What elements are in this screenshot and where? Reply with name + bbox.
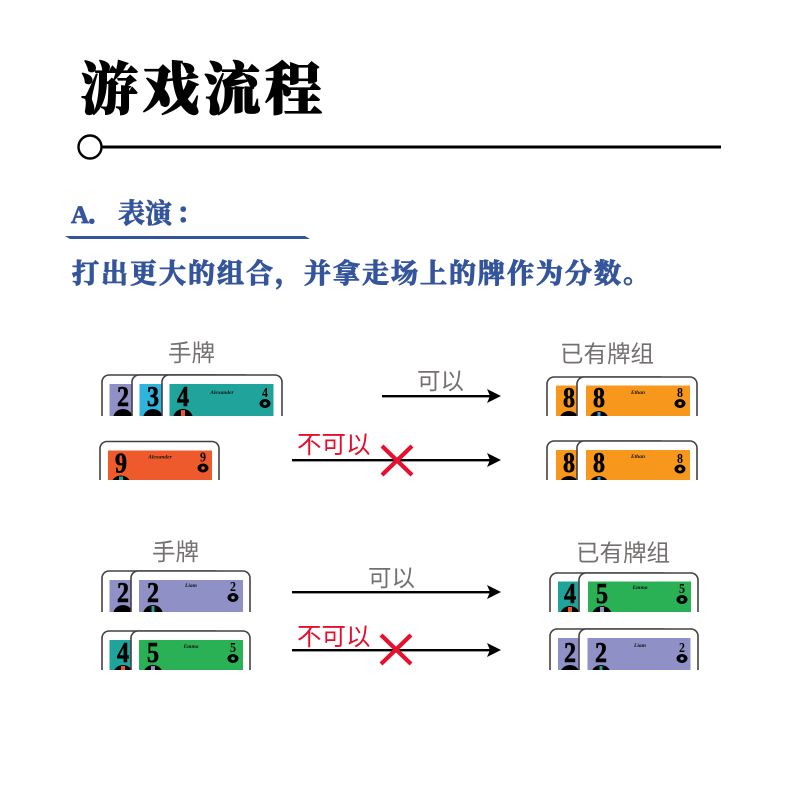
- card: teal 4: 4: [262, 386, 268, 401]
- card: teal 4: Alexander: [209, 390, 235, 396]
- existing set row 1: [546, 376, 698, 416]
- title: 游戏流程: [81, 59, 322, 122]
- label: existing set 1: 已有牌组: [560, 341, 654, 367]
- card: teal 4 back: 4: [117, 638, 129, 669]
- existing set row 4: [549, 628, 699, 670]
- card: purple 2 front: 2: [679, 641, 685, 656]
- label: not allowed 1: 不可以: [297, 432, 370, 459]
- card: teal 4 back: 4: [564, 579, 576, 610]
- icon: red cross row 2: [382, 446, 412, 475]
- section underline: [65, 236, 310, 239]
- card: blue 3: 3: [147, 382, 159, 413]
- card: green 5 front: 5: [679, 582, 685, 597]
- card: orange 8 front: [576, 376, 698, 416]
- card: green 5 front: [130, 630, 251, 670]
- card: orange 8 back: [546, 440, 662, 480]
- card: green 5 front: Emma: [183, 644, 199, 650]
- card: purple 2 front: 2: [595, 638, 607, 669]
- hand card row 2: red 9: Alexander: [147, 454, 173, 460]
- section description: 打出更大的组合，并拿走场上的牌作为分数。: [72, 259, 650, 290]
- existing set row 3: [549, 572, 699, 612]
- card: green 5 front: 5: [230, 641, 236, 656]
- arrow: allowed row 1: [382, 389, 501, 403]
- section heading: 表演: [118, 198, 176, 229]
- card: orange 8 front: 8: [677, 452, 683, 467]
- section heading: ：: [176, 199, 203, 229]
- label: hand 2: 手牌: [152, 539, 199, 565]
- card: purple 2 front: 2: [230, 580, 236, 595]
- label: hand 1: 手牌: [168, 340, 215, 366]
- card: purple 2 back: [101, 570, 217, 612]
- label: existing set 2: 已有牌组: [576, 540, 670, 566]
- hand card row 2: red 9: [99, 440, 220, 480]
- card: purple 2 front: [578, 628, 699, 670]
- label: not allowed 2: 不可以: [297, 624, 370, 651]
- section heading: ．: [88, 199, 115, 229]
- hand cards row 1: [101, 374, 283, 416]
- card: teal 4 back: [101, 630, 217, 670]
- card: orange 8 back: 8: [563, 383, 575, 414]
- card: orange 8 front: 8: [677, 386, 683, 401]
- card: orange 8 front: Ethan: [630, 454, 645, 460]
- arrow: allowed row 3: [292, 585, 501, 599]
- icon: red cross row 4: [381, 635, 411, 664]
- card: purple 2 back: [549, 628, 665, 670]
- card: purple 2 front: [130, 570, 251, 612]
- card: blue 3: [131, 374, 247, 416]
- card: purple 2 front: Liam: [184, 583, 198, 589]
- card: teal 4: [161, 374, 283, 416]
- card: green 5 front: 5: [596, 579, 608, 610]
- card: orange 8 back: [546, 376, 662, 416]
- card: purple 2: 2: [117, 382, 129, 413]
- card: teal 4 back: [549, 572, 665, 612]
- card: orange 8 front: 8: [593, 383, 605, 414]
- card: orange 8 front: [576, 440, 698, 480]
- card: orange 8 front: Ethan: [630, 390, 645, 396]
- arrow: not allowed row 2: [292, 453, 501, 467]
- section heading: A: [71, 202, 89, 229]
- card: purple 2 front: 2: [147, 578, 159, 609]
- card: green 5 front: [578, 572, 699, 612]
- label: allowed 1: 可以: [417, 368, 464, 394]
- title rule with circle: [78, 136, 721, 158]
- existing set row 2: [546, 440, 698, 480]
- card: green 5 front: Emma: [632, 585, 648, 591]
- hand card row 2: red 9: 9: [200, 450, 206, 466]
- hand cards row 4: [101, 630, 251, 670]
- hand card row 2: red 9: 9: [115, 448, 127, 480]
- card: purple 2 back: 2: [117, 578, 129, 609]
- card: purple 2 back: 2: [564, 638, 576, 669]
- card: purple 2 front: Liam: [633, 643, 647, 649]
- hand cards row 3: [101, 570, 251, 612]
- card: teal 4: 4: [177, 382, 189, 413]
- card: orange 8 front: 8: [593, 448, 605, 479]
- card: purple 2: [101, 374, 216, 416]
- card: green 5 front: 5: [147, 638, 159, 669]
- arrow: not allowed row 4: [292, 643, 501, 657]
- card: orange 8 back: 8: [563, 448, 575, 479]
- label: allowed 2: 可以: [368, 565, 415, 591]
